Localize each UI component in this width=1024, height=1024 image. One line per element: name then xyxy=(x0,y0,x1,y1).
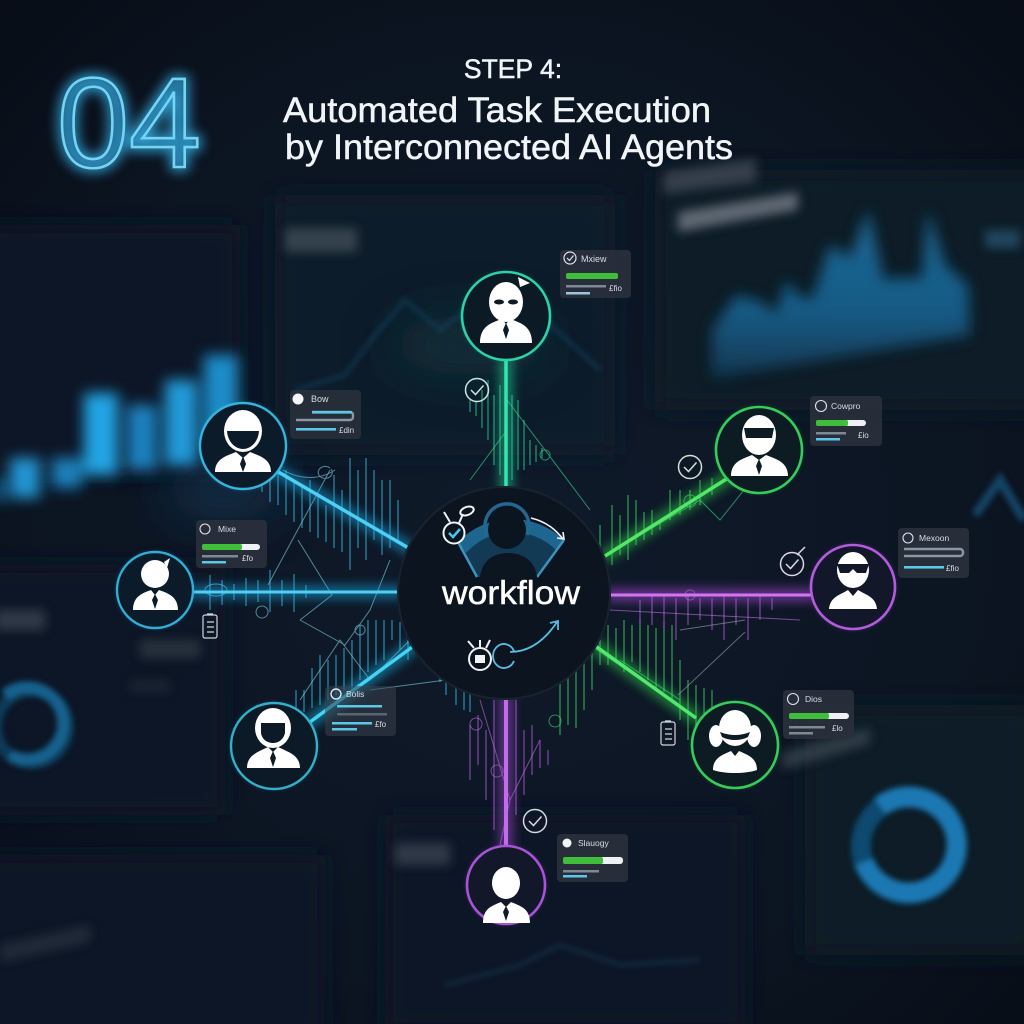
agent: bottom xyxy=(466,845,546,925)
status card: upper right agent: Cowpro xyxy=(831,401,861,411)
background chart: faint line charts xyxy=(295,300,1024,985)
hub arrow top xyxy=(531,518,564,539)
hub label: workflow xyxy=(441,574,580,611)
hub check icon xyxy=(444,505,475,544)
background donut left xyxy=(0,687,68,763)
spoke: upper right agent xyxy=(605,478,728,556)
spoke: right agent xyxy=(608,594,812,596)
status card: left agent: Mixe xyxy=(218,524,236,534)
status card: right agent xyxy=(898,528,969,578)
background donut right xyxy=(861,796,957,894)
status card: lower right agent: Dios xyxy=(805,694,822,704)
status card: lower left agent: £fo xyxy=(375,720,387,729)
title number 04: 04 xyxy=(57,52,201,195)
spoke: lower left agent xyxy=(310,645,415,722)
status card: top agent: £fio xyxy=(609,284,622,293)
status card: lower right agent xyxy=(783,690,854,739)
agent: upper left xyxy=(199,402,287,490)
blurred background labels xyxy=(0,158,1020,962)
check icon: top xyxy=(466,378,488,402)
hub person arc icon xyxy=(458,504,564,577)
background chart: blue bars xyxy=(0,355,238,502)
title number 04: 04 xyxy=(57,52,201,195)
status card: bottom agent: Slauogy xyxy=(578,838,609,848)
title: by Interconnected AI Agents xyxy=(285,128,733,167)
clipboard icon: lower right xyxy=(661,721,675,745)
spoke: bottom agent xyxy=(504,695,508,848)
agent: lower left xyxy=(230,702,318,790)
spoke glows xyxy=(193,360,812,848)
agent: upper right xyxy=(715,406,803,494)
check icon: bottom xyxy=(524,810,546,832)
background chart: area mountains top right xyxy=(712,210,970,378)
spoke: top agent xyxy=(504,360,508,495)
status card: upper left agent: Bow xyxy=(311,394,329,404)
title xyxy=(283,54,733,167)
hub bottom icon xyxy=(468,640,491,670)
spoke: lower right agent xyxy=(594,645,696,718)
title: Automated Task Execution xyxy=(283,91,711,130)
status card: lower left agent: Bolis xyxy=(346,689,364,699)
network lines xyxy=(205,400,800,845)
agent: right xyxy=(810,544,896,630)
status card: upper left agent xyxy=(290,390,361,439)
agent: left xyxy=(116,551,194,629)
haze xyxy=(165,315,550,520)
workflow hub xyxy=(397,486,611,700)
hub arrow bottom xyxy=(493,621,558,668)
status card: left agent xyxy=(196,520,267,568)
status card: upper right agent xyxy=(810,396,882,446)
spoke: left agent xyxy=(193,590,402,594)
status card: right agent: £fio xyxy=(946,564,959,573)
status card: upper left agent: £din xyxy=(339,426,354,435)
status card: lower left agent xyxy=(325,686,396,736)
check icon: right xyxy=(780,547,805,576)
status card: right agent: Mexoon xyxy=(919,533,950,543)
status card: upper right agent: £io xyxy=(858,431,869,440)
check icon: upper right xyxy=(678,456,702,478)
status card: left agent: £fo xyxy=(242,554,254,563)
clipboard icon: left xyxy=(203,614,217,638)
status card: lower right agent: £lo xyxy=(832,724,843,733)
waveforms xyxy=(210,380,772,830)
status card: bottom agent xyxy=(557,834,628,882)
status card: top agent xyxy=(560,250,631,298)
spoke: upper left agent xyxy=(275,470,412,550)
agent: top xyxy=(461,271,551,361)
agent: lower right xyxy=(691,701,779,789)
status card: top agent: Mxiew xyxy=(581,254,607,264)
title: STEP 4: xyxy=(464,54,562,84)
